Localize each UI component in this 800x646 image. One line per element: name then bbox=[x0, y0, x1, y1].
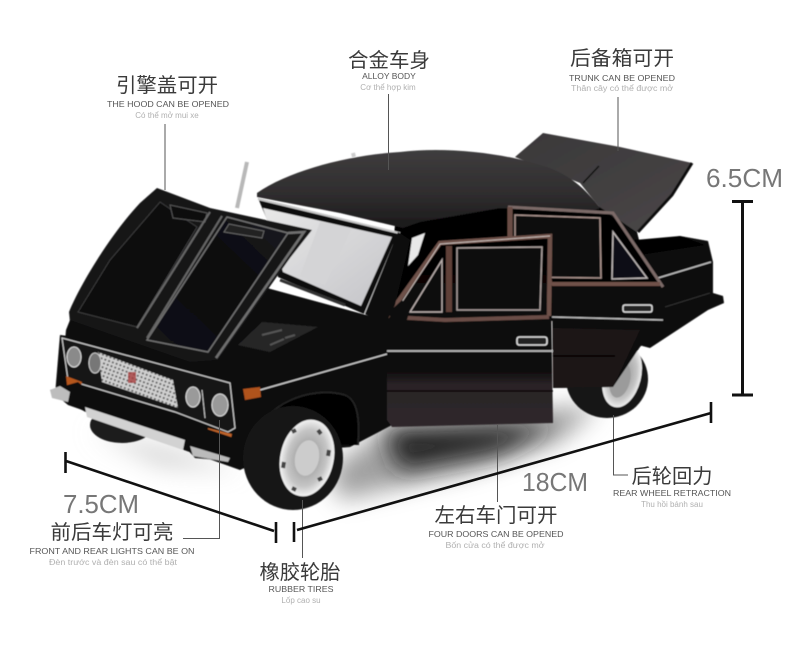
headlights bbox=[67, 347, 81, 367]
leader line: trunk bbox=[617, 97, 619, 151]
label: alloy body bbox=[348, 49, 430, 92]
leader line: rubber tires bbox=[302, 500, 304, 558]
leader line: alloy body bbox=[388, 94, 390, 170]
cabin side glass bbox=[385, 200, 660, 322]
ground shadow bbox=[90, 405, 600, 500]
hood left panel bbox=[78, 202, 197, 327]
label: hood: 引擎盖可开 bbox=[116, 74, 218, 97]
windshield bbox=[258, 198, 399, 314]
dimension: length 18CM bbox=[294, 402, 711, 542]
rear door window frame bbox=[515, 215, 601, 278]
leader line: lights bbox=[183, 420, 220, 538]
bumper bbox=[50, 382, 240, 462]
label: lights bbox=[30, 521, 194, 567]
label: rear wheel bbox=[613, 465, 731, 509]
label: doors: FOUR DOORS CAN BE OPENED bbox=[428, 529, 564, 539]
engine bay bbox=[220, 293, 345, 360]
label: trunk: TRUNK CAN BE OPENED bbox=[569, 73, 675, 83]
trunk lid bbox=[515, 133, 692, 232]
dimension: width 7.5CM: 7.5CM bbox=[63, 489, 139, 519]
label: rubber tires: 橡胶轮胎 bbox=[260, 561, 340, 584]
label: lights: 前后车灯可亮 bbox=[50, 521, 174, 544]
label: rear wheel: Thu hồi bánh sau bbox=[641, 500, 703, 509]
dimension: length 18CM: 18CM bbox=[522, 467, 588, 497]
A pillar bbox=[365, 232, 410, 325]
hood prop rods bbox=[237, 153, 354, 208]
open hood bbox=[69, 188, 312, 362]
label: rear wheel: 后轮回力 bbox=[632, 465, 712, 488]
label: rubber tires: RUBBER TIRES bbox=[268, 584, 334, 594]
label: hood bbox=[107, 74, 229, 120]
rear body bbox=[600, 236, 724, 348]
front door bbox=[387, 235, 553, 427]
dimension: height 6.5CM bbox=[706, 163, 783, 395]
label: alloy body: Cơ thể hợp kim bbox=[360, 83, 416, 92]
label: hood: THE HOOD CAN BE OPENED bbox=[107, 99, 229, 109]
label: lights: Đèn trước và đèn sau có thể bật bbox=[49, 558, 178, 567]
rear door handle bbox=[623, 305, 652, 312]
leader line: hood bbox=[164, 124, 166, 190]
roof bbox=[257, 150, 600, 228]
label: rubber tires bbox=[260, 561, 340, 605]
label: trunk: Thân cây có thể được mở bbox=[571, 84, 674, 93]
label: rear wheel: REAR WHEEL RETRACTION bbox=[613, 488, 731, 498]
label: trunk bbox=[569, 47, 675, 93]
rear door bbox=[508, 207, 663, 388]
quarter glass bbox=[612, 232, 647, 279]
label: doors bbox=[428, 504, 564, 550]
dimension: height 6.5CM: 6.5CM bbox=[706, 163, 783, 193]
front left tire bbox=[90, 407, 154, 443]
front door handle bbox=[517, 337, 547, 345]
car model bbox=[50, 133, 724, 510]
door mirror bbox=[389, 300, 410, 326]
label: doors: Bốn cửa có thể được mở bbox=[446, 541, 545, 550]
front wheel bbox=[243, 406, 343, 510]
front fender and sill bbox=[225, 325, 392, 458]
label: alloy body: 合金车身 bbox=[348, 49, 430, 72]
label: trunk: 后备箱可开 bbox=[570, 47, 674, 70]
label: lights: FRONT AND REAR LIGHTS CAN BE ON bbox=[30, 546, 194, 556]
leader line: rear wheel bbox=[614, 415, 628, 475]
front door window bbox=[457, 247, 542, 310]
turn signals bbox=[66, 376, 82, 390]
label: rubber tires: Lốp cao su bbox=[281, 596, 321, 605]
dimension: width 7.5CM bbox=[63, 452, 276, 543]
label: doors: 左右车门可开 bbox=[434, 504, 558, 527]
hood right panel bbox=[147, 217, 288, 352]
trunk opening bbox=[598, 206, 662, 290]
body base under hood bbox=[55, 288, 392, 470]
label: hood: Có thể mở mui xe bbox=[135, 111, 199, 120]
label: alloy body: ALLOY BODY bbox=[362, 71, 416, 81]
front face bbox=[62, 320, 240, 443]
leader line: doors bbox=[496, 425, 498, 502]
grille bbox=[98, 352, 178, 408]
rear wheel bbox=[566, 340, 648, 418]
